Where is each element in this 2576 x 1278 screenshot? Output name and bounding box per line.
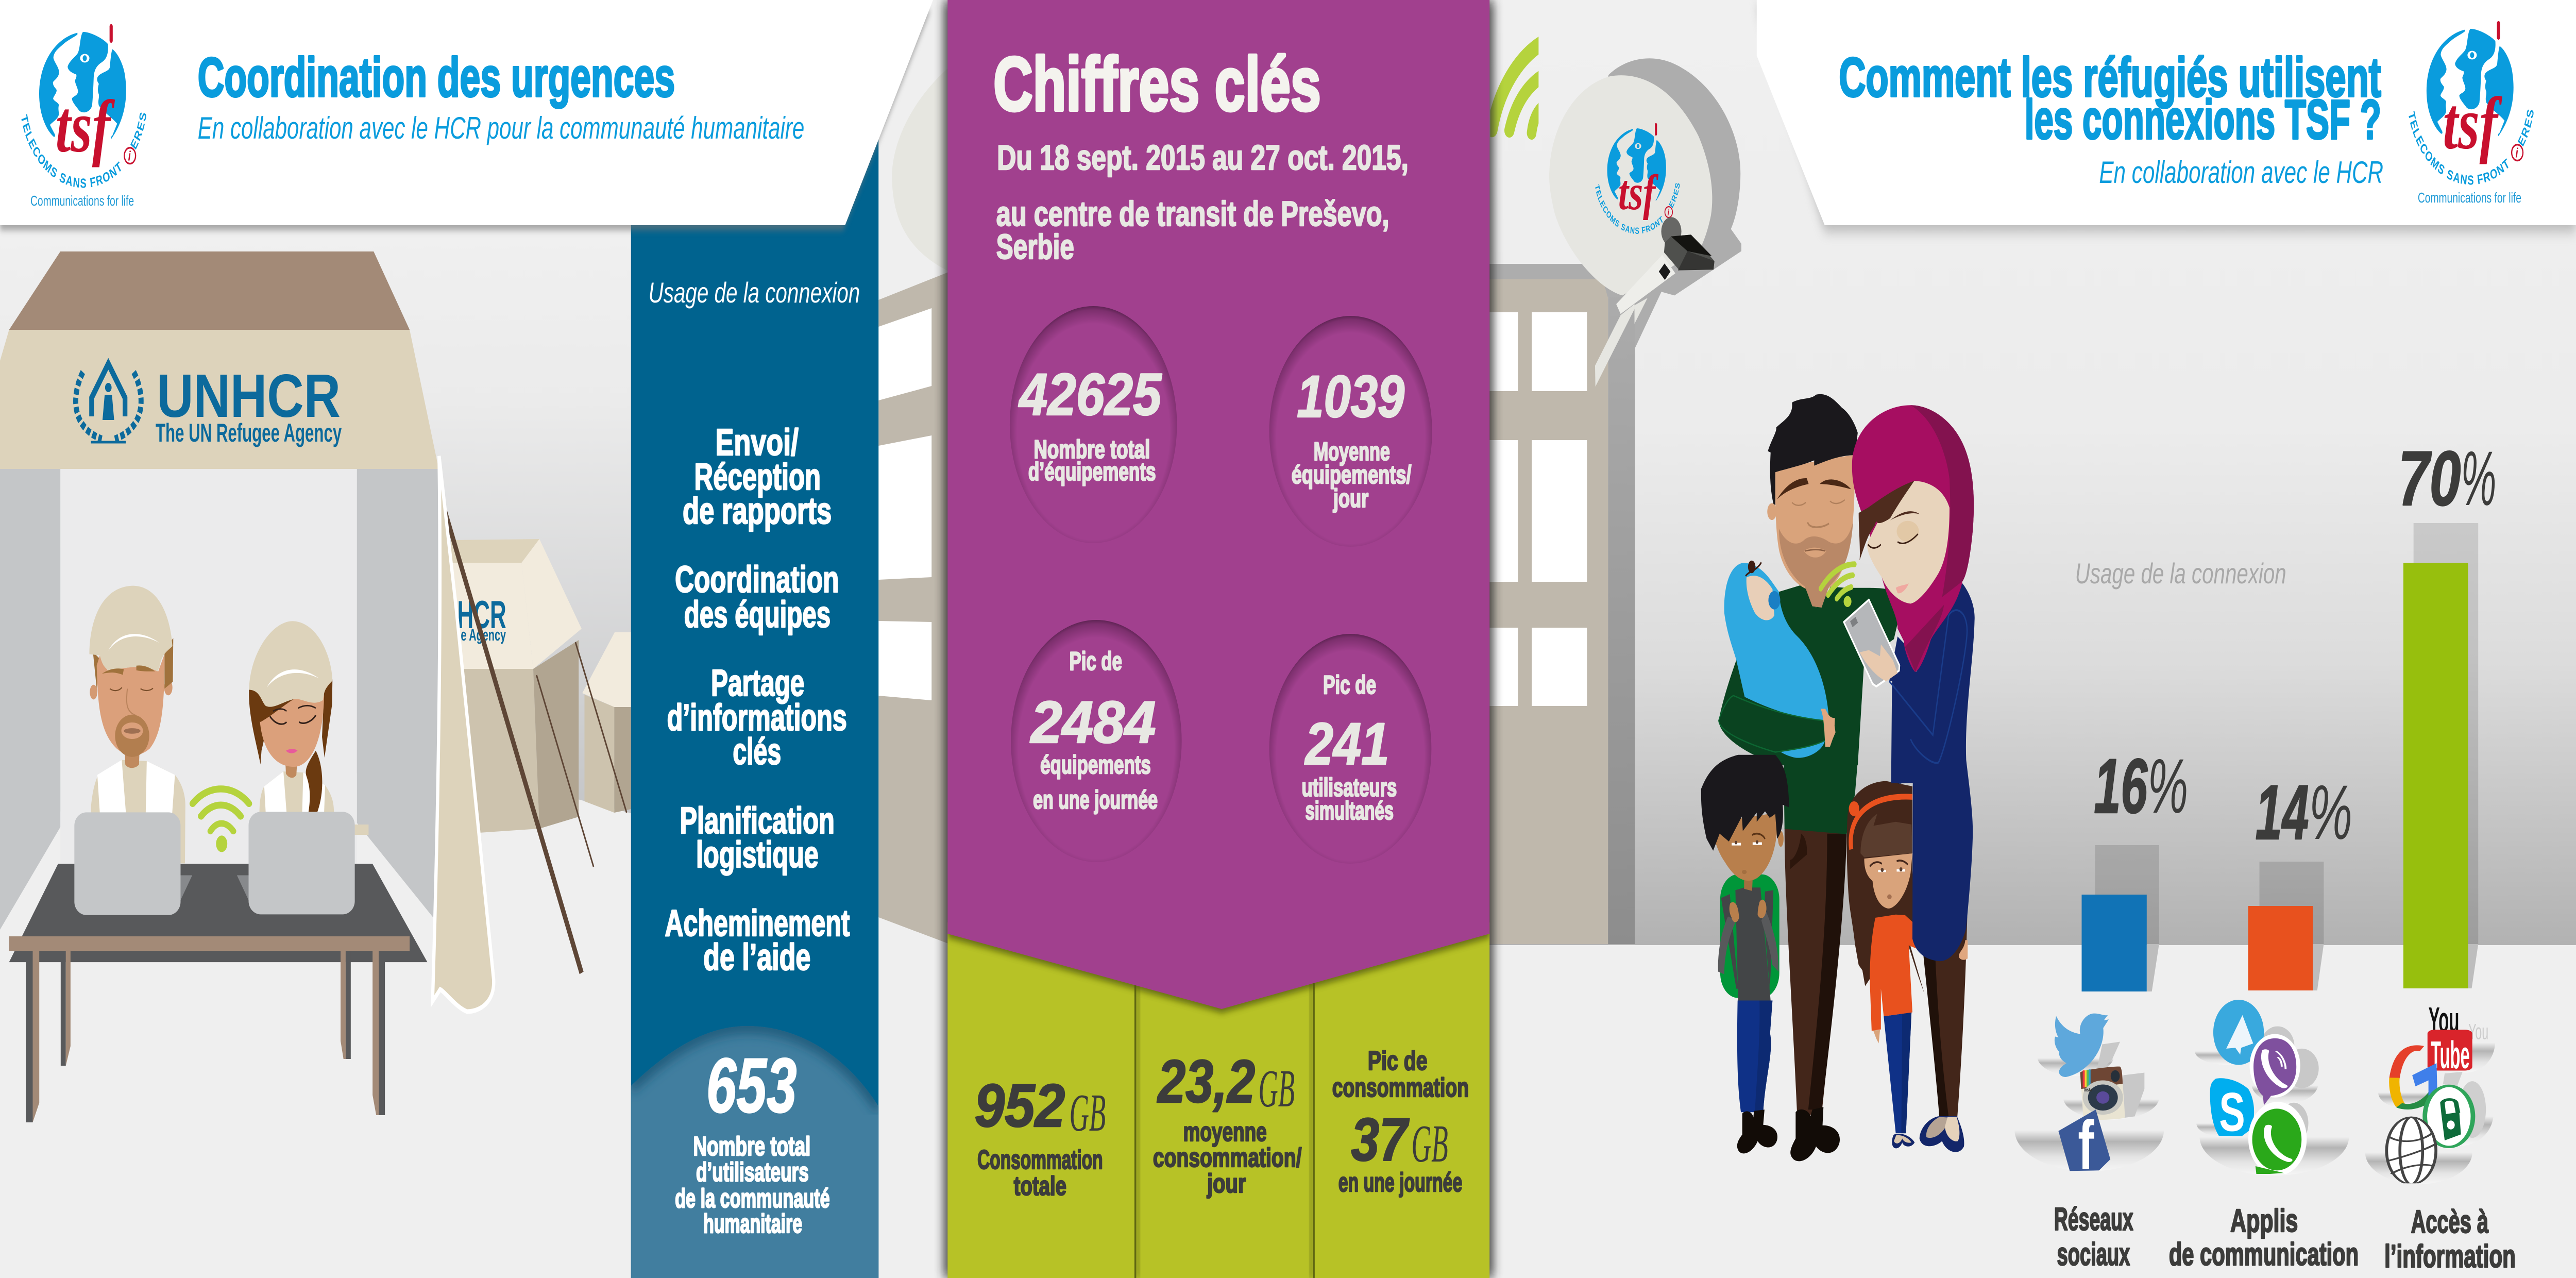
logo: TSF: ERES bbox=[128, 109, 149, 152]
laptop stand shadows bbox=[180, 876, 248, 900]
dates and location: Serbie bbox=[996, 228, 1074, 266]
strut bbox=[1595, 304, 1635, 386]
logo: TSF bbox=[2406, 21, 2536, 206]
father and mother legs bbox=[1784, 761, 1968, 1161]
tan bar bbox=[355, 825, 368, 835]
logo on dish: tsf bbox=[1618, 165, 1659, 221]
bar: access to information 70%: 70 bbox=[2398, 435, 2461, 522]
label: connection usage: Usage de la connexion bbox=[2075, 558, 2286, 590]
phone bbox=[1844, 600, 1900, 686]
humanitarian workers at the table bbox=[9, 586, 428, 962]
header shadow right bbox=[1757, 5, 2576, 232]
icon: wifi above building bbox=[1492, 43, 1544, 133]
floor: right bbox=[878, 945, 2576, 1278]
small tent in background: ee Agency bbox=[455, 626, 506, 644]
stat circle: peak devices: équipements bbox=[1040, 751, 1151, 780]
father upper body, baby and phone bbox=[1719, 394, 1900, 765]
stat circle: peak simultaneous users: 241 bbox=[1304, 711, 1389, 777]
laptop right bbox=[248, 812, 355, 914]
dividers bbox=[1134, 979, 1315, 1278]
icon: viber bbox=[2249, 1034, 2300, 1105]
small tent in background: HCR bbox=[457, 593, 506, 636]
icon: youtube: You bbox=[2468, 1019, 2488, 1044]
boy with backpack bbox=[1701, 755, 1789, 1153]
man bbox=[90, 586, 185, 863]
stat: average consumption: GB bbox=[1259, 1060, 1295, 1118]
building: right of purple panel bbox=[1487, 264, 1635, 944]
icon: facebook bbox=[2058, 1106, 2110, 1184]
stat: peak consumption: GB bbox=[1412, 1115, 1448, 1173]
apps shadows bbox=[2261, 1027, 2319, 1144]
panel shadow bbox=[943, 0, 1494, 1278]
stat: total consumption bbox=[974, 1072, 1106, 1201]
stat circle: daily average devices bbox=[1269, 316, 1432, 547]
usage: partage: clés bbox=[733, 731, 781, 772]
icon: skype bbox=[2210, 1078, 2254, 1143]
social network bowls bbox=[2014, 1058, 2164, 1171]
logo on dish: ERES bbox=[1669, 183, 1680, 208]
icon: whatsapp bbox=[2248, 1102, 2307, 1175]
mother face bbox=[1867, 481, 1950, 603]
hijab bbox=[1852, 405, 1974, 672]
bar: access to information 70%: % bbox=[2461, 435, 2496, 522]
stat: average consumption: moyenne bbox=[1183, 1117, 1267, 1147]
panel: data consumption (green) bbox=[947, 876, 1489, 1278]
usage: partage bbox=[667, 663, 847, 772]
stat: peak consumption: consommation bbox=[1332, 1072, 1469, 1103]
father head bbox=[1767, 394, 1858, 608]
title: Coordination des urgences bbox=[198, 46, 675, 108]
woman bbox=[249, 621, 334, 813]
table bbox=[9, 936, 410, 1122]
background: top centre light zone bbox=[878, 0, 951, 948]
logo: TSF: ERES bbox=[2516, 106, 2536, 149]
stat circle: peak simultaneous users bbox=[1269, 634, 1431, 864]
building: left of purple panel bbox=[878, 271, 952, 945]
stat circle: total devices: 42625 bbox=[1018, 362, 1162, 428]
header: left banner bbox=[0, 0, 933, 225]
logo: TSF: tsf bbox=[2443, 83, 2503, 165]
bar: communication apps 14%: % bbox=[2309, 769, 2352, 855]
usage: coordination: Coordination bbox=[675, 559, 839, 600]
background: right scene wall gradient bbox=[1487, 0, 2576, 945]
icon: UNHCR emblem bbox=[76, 364, 141, 442]
refugee family bbox=[1701, 394, 1975, 1161]
logo: TSF: TELECOMS SANS FRONT bbox=[2406, 110, 2512, 188]
tent right wall bbox=[357, 466, 438, 923]
icon: youtube: You bbox=[2429, 1000, 2459, 1040]
usage: acheminement: de l’aide bbox=[703, 937, 810, 978]
icon: globe bbox=[2386, 1117, 2436, 1184]
header shadow left bbox=[0, 10, 930, 230]
usage: partage: Partage bbox=[711, 663, 804, 704]
mother bbox=[1844, 405, 1975, 961]
icon: instagram: Insta bbox=[2084, 1087, 2092, 1092]
stat circle: daily average devices: jour bbox=[1333, 484, 1368, 513]
stat: peak consumption: Pic de bbox=[1368, 1046, 1428, 1076]
usage: planification: logistique bbox=[696, 834, 819, 876]
chevron shadow bbox=[947, 876, 1489, 1013]
UNHCR wordmark: UNHCR bbox=[157, 362, 341, 430]
icon: instagram bbox=[2080, 1067, 2125, 1120]
usage: rapports: Envoi/ bbox=[715, 422, 799, 463]
stat: average consumption: consommation/ bbox=[1153, 1142, 1302, 1173]
icon: skype: S bbox=[2219, 1081, 2245, 1143]
apps bowls bbox=[2195, 1051, 2349, 1175]
label: social networks bbox=[2054, 1202, 2133, 1272]
stat: total consumption: totale bbox=[1014, 1171, 1066, 1201]
baby bbox=[1719, 561, 1836, 758]
stat: total consumption: 952 bbox=[974, 1072, 1065, 1139]
icon: youtube bbox=[2428, 1000, 2488, 1077]
icon: youtube: Tube bbox=[2431, 1033, 2470, 1077]
caption: de la communauté bbox=[675, 1183, 830, 1214]
stat circle: peak devices: Pic de bbox=[1070, 647, 1122, 676]
usage: rapports bbox=[683, 422, 832, 532]
subtitle: En collaboration avec le HCR pour la communauté humanitaire bbox=[198, 111, 804, 146]
dates and location bbox=[996, 139, 1409, 266]
stat circle: peak devices: 2484 bbox=[1030, 690, 1156, 755]
label: communication apps bbox=[2169, 1203, 2359, 1272]
stat: average consumption: 23,2 bbox=[1157, 1048, 1255, 1115]
header: right banner bbox=[1757, 0, 2576, 225]
tent curtain bbox=[433, 456, 494, 1012]
stat circle: peak simultaneous users: simultanés bbox=[1306, 797, 1394, 826]
laptop left bbox=[74, 812, 180, 915]
tent ropes bbox=[445, 511, 626, 973]
logo: TSF: i bbox=[2516, 145, 2518, 160]
humanitarian users arc bbox=[631, 1026, 878, 1278]
dish edge behind purple panel bbox=[892, 64, 952, 273]
icons: social networks, apps and information sources bbox=[2014, 1000, 2495, 1184]
icon: wifi bbox=[193, 789, 249, 852]
logo on dish: i bbox=[1667, 208, 1670, 218]
title: les connexions TSF ? bbox=[2025, 88, 2381, 150]
caption: Nombre total bbox=[693, 1131, 810, 1162]
usage: acheminement bbox=[665, 903, 850, 978]
stat circle: total devices: d’équipements bbox=[1028, 458, 1156, 486]
icon: lock bbox=[2425, 1086, 2473, 1147]
icon: twitter bbox=[2055, 1014, 2109, 1077]
stat circle: peak simultaneous users: utilisateurs bbox=[1301, 773, 1397, 802]
third tent bbox=[582, 632, 631, 813]
stat circle: daily average devices: équipements/ bbox=[1292, 461, 1412, 490]
stat: peak consumption: 37 bbox=[1351, 1106, 1410, 1173]
father torso bbox=[1719, 584, 1900, 765]
table legs bbox=[26, 951, 32, 1122]
big number: 653 bbox=[706, 1042, 796, 1129]
mother coat bbox=[1889, 581, 1975, 961]
tent banner bbox=[0, 330, 439, 469]
icon: google bbox=[2394, 1048, 2437, 1107]
usage: rapports: Réception bbox=[694, 457, 821, 498]
LNB feed bbox=[1661, 217, 1682, 246]
label: communication apps: Applis bbox=[2230, 1203, 2298, 1239]
dish face bbox=[1549, 75, 1712, 295]
info shadows bbox=[2443, 1072, 2486, 1138]
logo: TSF: tsf bbox=[56, 86, 115, 168]
tent scene: UNHCR registration tent bbox=[0, 251, 631, 1012]
UNHCR tagline: The UN Refugee Agency bbox=[156, 419, 342, 448]
info bowls bbox=[2365, 1042, 2495, 1184]
bar: social networks 16%: 16 bbox=[2094, 743, 2148, 829]
logo: TSF: i bbox=[128, 148, 131, 163]
panel: key figures (purple) bbox=[947, 0, 1489, 1009]
dates and location: au centre de transit de Preševo, bbox=[996, 195, 1389, 233]
bar: communication apps 14%: 14 bbox=[2256, 769, 2309, 855]
hand with phone bbox=[1859, 644, 1897, 681]
bar: communication apps 14% bbox=[2248, 769, 2352, 990]
title: Comment les réfugiés utilisent bbox=[1839, 46, 2381, 108]
dates and location: Du 18 sept. 2015 au 27 oct. 2015, bbox=[997, 139, 1409, 177]
bar: social networks 16%: % bbox=[2147, 743, 2188, 829]
stat: total consumption: Consommation bbox=[977, 1145, 1103, 1175]
social network shadows bbox=[2096, 1042, 2144, 1118]
stat: peak consumption: en une journée bbox=[1338, 1167, 1462, 1198]
label: social networks: sociaux bbox=[2057, 1237, 2130, 1272]
caption: d’utilisateurs bbox=[696, 1157, 809, 1187]
stat circle: daily average devices: Moyenne bbox=[1314, 438, 1390, 466]
heading: Chiffres clés bbox=[993, 42, 1321, 127]
panel: connection usage (blue) bbox=[631, 139, 878, 1278]
logo: TSF bbox=[19, 24, 149, 209]
stat circle: peak devices bbox=[1011, 620, 1182, 862]
icon: telegram bbox=[2213, 1000, 2264, 1065]
logo on dish: TELECOMS SANS FRONT bbox=[1595, 183, 1663, 234]
dish shadow bbox=[1595, 58, 1741, 348]
stat: average consumption: jour bbox=[1207, 1168, 1246, 1199]
floor: left bbox=[0, 763, 631, 1278]
tent back wall bbox=[60, 466, 357, 868]
usage: rapports: de rapports bbox=[683, 491, 832, 532]
label: access to information: l’information bbox=[2384, 1239, 2516, 1274]
stat circle: total devices: Nombre total bbox=[1033, 435, 1150, 464]
logo on dish bbox=[1593, 123, 1682, 236]
stat circle: peak simultaneous users: Pic de bbox=[1323, 671, 1376, 700]
girl bbox=[1847, 781, 1924, 1148]
logo: TSF: Communications for life bbox=[2418, 190, 2521, 206]
label: access to information bbox=[2384, 1204, 2516, 1274]
logo: TSF: TELECOMS SANS FRONT bbox=[22, 114, 121, 188]
bar: access to information 70% bbox=[2398, 435, 2496, 988]
tent left wall bbox=[0, 466, 60, 930]
usage: partage: d’informations bbox=[667, 697, 847, 738]
stat circle: daily average devices: 1039 bbox=[1297, 364, 1404, 430]
subtitle: En collaboration avec le HCR bbox=[2099, 156, 2383, 190]
label: access to information: Accès à bbox=[2411, 1204, 2488, 1240]
usage: coordination bbox=[675, 559, 839, 635]
caption: humanitaire bbox=[703, 1208, 802, 1239]
stat: average consumption bbox=[1153, 1048, 1302, 1199]
usage: coordination: des équipes bbox=[684, 594, 831, 635]
small tent in background bbox=[451, 539, 582, 833]
logo: TSF: Communications for life bbox=[30, 193, 134, 209]
wifi at father's shoulder bbox=[1821, 564, 1855, 607]
bar: social networks 16% bbox=[2081, 743, 2188, 991]
stat circle: peak devices: en une journée bbox=[1033, 786, 1158, 815]
usage: planification: Planification bbox=[680, 800, 835, 842]
icon: facebook: f bbox=[2078, 1106, 2094, 1184]
chart: connection usage bars bbox=[2081, 435, 2496, 991]
satellite dish bbox=[1549, 58, 1741, 386]
stat circle: total devices bbox=[1010, 306, 1177, 543]
label: communication apps: de communication bbox=[2169, 1237, 2359, 1272]
table top bbox=[9, 864, 428, 962]
usage: planification bbox=[680, 800, 835, 876]
stat: peak consumption bbox=[1332, 1046, 1469, 1198]
label: social networks: Réseaux bbox=[2054, 1202, 2133, 1237]
stat: total consumption: GB bbox=[1070, 1084, 1106, 1142]
coat detail bbox=[1889, 610, 1967, 763]
panel label: Usage de la connexion bbox=[649, 277, 860, 309]
title bbox=[1839, 46, 2381, 150]
usage: acheminement: Acheminement bbox=[665, 903, 850, 944]
background: left scene bbox=[0, 225, 878, 818]
tent roof bbox=[9, 251, 410, 330]
caption bbox=[675, 1131, 830, 1239]
